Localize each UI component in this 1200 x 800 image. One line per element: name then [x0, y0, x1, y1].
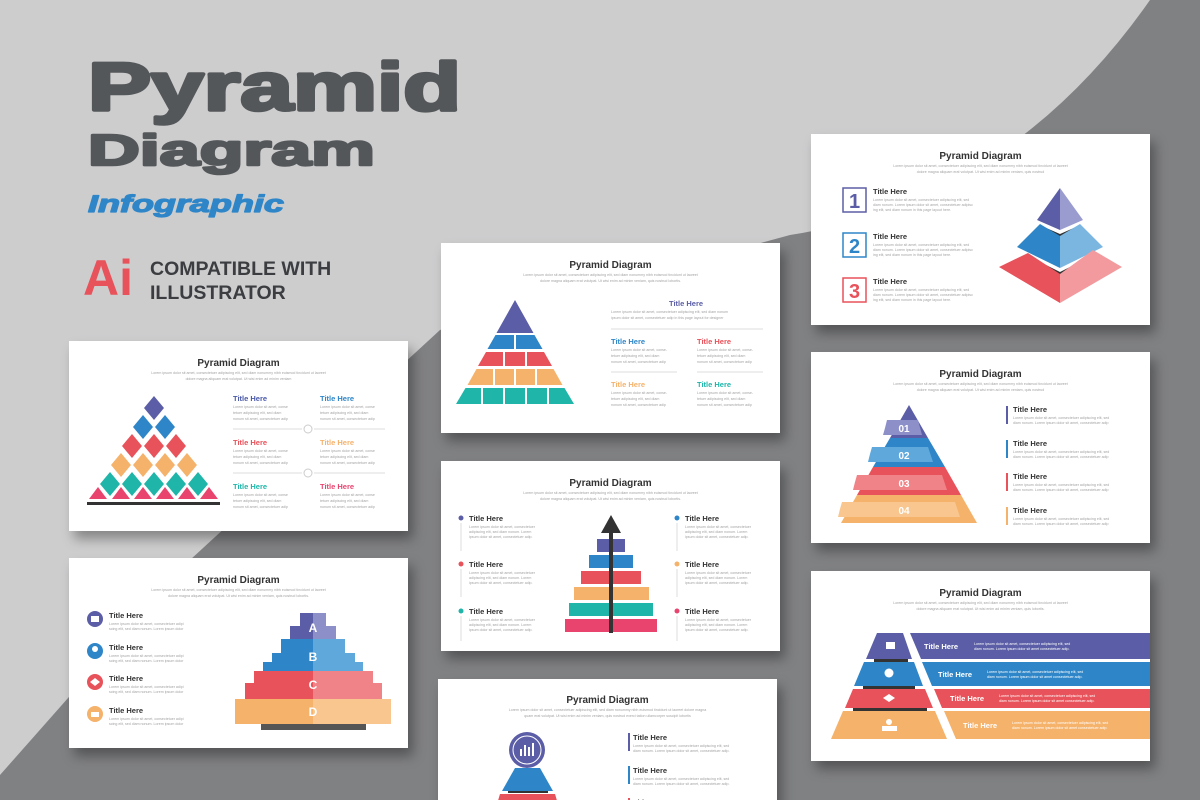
list right: Title Here: [685, 560, 719, 569]
panel: pyramid with bands: Pyramid Diagram: [939, 588, 1022, 599]
list: Lorem ipsum dolor sit amet, consectetuer adipiscing elit, sed: [633, 777, 729, 781]
chart: 3D pyramid: [999, 188, 1122, 303]
list left: Title Here: [469, 560, 503, 569]
chart: stepped pyramid 01-04: 04: [898, 506, 910, 517]
panel: brick pyramid: Lorem ipsum dolor sit amet, consectetuer adipiscing elit, sed diam nonummy nibh euismod tincidunt ut laoreet: [523, 273, 698, 277]
panel: circle-top pyramid (cropped): Pyramid Diagram: [566, 695, 649, 706]
badge: Ai compatible: Ai: [83, 250, 133, 306]
list right: ipsum dolor sit amet, consectetuer adip.: [685, 581, 749, 585]
text blocks: Lorem ipsum dolor sit amet, conse-: [611, 391, 668, 395]
text blocks: tetuer adipiscing elit, sed diam: [611, 354, 659, 358]
panel: arrow stacked pyramid: dolore magna aliquam erat volutpat. Ut wisi enim ad minim veniam, quis nostrud lobortis.: [540, 497, 681, 501]
list left: [458, 514, 536, 641]
text blocks: [611, 299, 763, 407]
text blocks: nonum sit amet, consectetuer adip: [233, 461, 288, 465]
text blocks: Lorem ipsum dolor sit amet, conse: [233, 405, 288, 409]
chart: stepped pyramid 01-04: 03: [898, 479, 910, 490]
list: Lorem ipsum dolor sit amet, consectetuer adipiscing elit, sed: [633, 744, 729, 748]
list: Title Here: [1013, 405, 1047, 414]
text blocks: tetuer adipiscing elit, sed diam: [233, 455, 281, 459]
text blocks: Lorem ipsum dolor sit amet, conse: [233, 493, 288, 497]
bands with titles: Lorem ipsum dolor sit amet, consectetuer adipiscing elit, sed: [987, 670, 1083, 674]
panel: pyramid with bands: Lorem ipsum dolor sit amet, consectetuer adipiscing elit, sed diam nonummy nibh euismod tincidunt ut laoreet: [893, 601, 1068, 605]
list: Lorem ipsum dolor sit amet, consectetuer adipiscing elit, sed: [1013, 483, 1109, 487]
text blocks: Title Here: [697, 337, 731, 346]
panel: circle-top pyramid (cropped): quam erat volutpat. Ut wisi enim ad minim veniam, quis nostrud exerci tation ullamcorper suscipit lobortis: [524, 714, 691, 718]
title: Diagram: Diagram: [88, 125, 375, 175]
text blocks: nonum sit amet, consectetuer adip: [233, 417, 288, 421]
chart: ABCD pyramid: A: [309, 621, 318, 635]
list left: Lorem ipsum dolor sit amet, consectetuer: [469, 571, 536, 575]
panel: ABCD step pyramid: Lorem ipsum dolor sit amet, consectetuer adipiscing elit, sed diam nonummy nibh euismod tincidunt ut laoreet: [151, 588, 326, 592]
text blocks: Title Here: [669, 299, 703, 308]
panel: pyramid with bands: [811, 571, 1150, 761]
list: Title Here: [1013, 439, 1047, 448]
bands with titles: diam nonum. Lorem ipsum dolor sit amet consectetuer adip.: [1012, 726, 1107, 730]
numbered list: 3: [849, 281, 860, 303]
panel: circle-top pyramid (cropped): [438, 679, 777, 800]
panel: arrow stacked pyramid: Lorem ipsum dolor sit amet, consectetuer adipiscing elit, sed diam nonummy nibh euismod tincidunt ut laoreet: [523, 491, 698, 495]
list left: adipiscing elit, sed diam nonum. Lorem: [469, 576, 531, 580]
text blocks: Lorem ipsum dolor sit amet, conse: [320, 405, 375, 409]
icon list: scing elit, sed diam nonum. Lorem ipsum dolor: [109, 690, 184, 694]
list: Title Here: [633, 733, 667, 742]
text blocks: tetuer adipiscing elit, sed diam: [320, 411, 368, 415]
icon list: scing elit, sed diam nonum. Lorem ipsum dolor: [109, 627, 184, 631]
list: diam nonum. Lorem ipsum dolor sit amet, consectetuer adip: [1013, 455, 1108, 459]
icon list: Lorem ipsum dolor sit amet, consectetuer adipi: [109, 685, 184, 689]
text blocks: Lorem ipsum dolor sit amet, conse: [233, 449, 288, 453]
list right: adipiscing elit, sed diam nonum. Lorem: [685, 530, 747, 534]
bands with titles: Title Here: [938, 670, 972, 679]
text blocks: nonum sit amet, consectetuer adip: [233, 505, 288, 509]
list right: Lorem ipsum dolor sit amet, consectetuer: [685, 618, 752, 622]
text blocks: ipsum dolor sit amet, consectetuer adip in this page layout for designer: [611, 316, 724, 320]
panel: stepped numbered pyramid: Pyramid Diagram: [939, 369, 1022, 380]
title block: [88, 49, 461, 217]
icon list: scing elit, sed diam nonum. Lorem ipsum dolor: [109, 722, 184, 726]
title: Pyramid: Pyramid: [88, 49, 461, 125]
bands with titles: Title Here: [963, 721, 997, 730]
text blocks: tetuer adipiscing elit, sed diam: [233, 499, 281, 503]
numbered list: Title Here: [873, 232, 907, 241]
numbered list: diam nonum. Lorem ipsum dolor sit amet, consectetuer adipisc: [873, 248, 973, 252]
list left: Lorem ipsum dolor sit amet, consectetuer: [469, 525, 536, 529]
panel: circle-top pyramid (cropped): Lorem ipsum dolor sit amet, consectetuer adipiscing elit, sed diam nonummy nibh euismod tincidunt ut laoreet dolore magna: [509, 708, 706, 712]
numbered list: Title Here: [873, 187, 907, 196]
chart: stepped pyramid 01-04: 01: [898, 424, 910, 435]
icon list: Title Here: [109, 643, 143, 652]
panel: arrow stacked pyramid: [441, 461, 780, 651]
list: Lorem ipsum dolor sit amet, consectetuer adipiscing elit, sed: [1013, 450, 1109, 454]
panel: arrow stacked pyramid: Pyramid Diagram: [569, 478, 652, 489]
list: diam nonum. Lorem ipsum dolor sit amet, consectetuer adip.: [633, 782, 729, 786]
chart: stepped pyramid 01-04: 02: [898, 451, 910, 462]
list right: Lorem ipsum dolor sit amet, consectetuer: [685, 525, 752, 529]
chart: diamond grid pyramid: [87, 396, 220, 505]
panel: diamond pyramid: [69, 341, 408, 531]
icon list: Lorem ipsum dolor sit amet, consectetuer adipi: [109, 654, 184, 658]
list right: adipiscing elit, sed diam nonum. Lorem: [685, 576, 747, 580]
panel: brick pyramid: Pyramid Diagram: [569, 260, 652, 271]
panel: diamond pyramid: dolore magna aliquam erat volutpat. Ut wisi enim ad minim veniam: [186, 377, 291, 381]
panel: ABCD step pyramid: Pyramid Diagram: [197, 575, 280, 586]
list left: ipsum dolor sit amet, consectetuer adip.: [469, 535, 533, 539]
icon list: scing elit, sed diam nonum. Lorem ipsum dolor: [109, 659, 184, 663]
list left: ipsum dolor sit amet, consectetuer adip.: [469, 628, 533, 632]
list: [1006, 405, 1109, 526]
panel: stepped numbered pyramid: [811, 352, 1150, 543]
text blocks: Title Here: [320, 438, 354, 447]
text blocks: Lorem ipsum dolor sit amet, conse: [320, 493, 375, 497]
list left: ipsum dolor sit amet, consectetuer adip.: [469, 581, 533, 585]
list left: adipiscing elit, sed diam nonum. Lorem: [469, 623, 531, 627]
text blocks: tetuer adipiscing elit, sed diam: [320, 499, 368, 503]
chart: circle pyramid: [497, 732, 558, 800]
numbered list: 1: [849, 191, 860, 213]
chart: ABCD pyramid: C: [309, 678, 318, 692]
panel: stepped numbered pyramid: dolore magna aliquam erat volutpat. Ut wisi enim ad minim veniam, quis nostrud: [917, 388, 1044, 392]
list right: adipiscing elit, sed diam nonum. Lorem: [685, 623, 747, 627]
bands with titles: Title Here: [950, 694, 984, 703]
icon list: [87, 611, 184, 726]
text blocks: Title Here: [233, 394, 267, 403]
subtitle: Infographic: Infographic: [88, 191, 284, 217]
text blocks: nonum sit amet, consectetuer adip: [320, 417, 375, 421]
text blocks: tetuer adipiscing elit, sed diam: [320, 455, 368, 459]
panel: 3D pyramid numbered: dolore magna aliquam erat volutpat. Ut wisi enim ad minim veniam, quis nostrud: [917, 170, 1044, 174]
panel: pyramid with bands: dolore magna aliquam erat volutpat. Ut wisi enim ad minim veniam, quis lobortis.: [916, 607, 1045, 611]
list: Lorem ipsum dolor sit amet, consectetuer adipiscing elit, sed: [1013, 517, 1109, 521]
bands with titles: diam nonum. Lorem ipsum dolor sit amet consectetuer adip.: [987, 675, 1082, 679]
numbered list: Lorem ipsum dolor sit amet, consectetuer adipiscing elit, sed: [873, 243, 969, 247]
panel: brick pyramid: [441, 243, 780, 433]
numbered list: ing elit, sed diam nonum in this page layout here.: [873, 298, 951, 302]
chart: brick pyramid: [456, 300, 574, 405]
list: diam nonum. Lorem ipsum dolor sit amet, consectetuer adip: [1013, 421, 1108, 425]
panel: diamond pyramid: Lorem ipsum dolor sit amet, consectetuer adipiscing elit, sed diam nonummy nibh euismod tincidunt ut laoreet: [151, 371, 326, 375]
badge: Ai compatible: [83, 250, 331, 306]
text blocks: nonum sit amet, consectetuer adip: [320, 505, 375, 509]
panel: 3D pyramid numbered: Pyramid Diagram: [939, 151, 1022, 162]
text blocks: Lorem ipsum dolor sit amet, conse-: [697, 348, 754, 352]
panel: diamond pyramid: Pyramid Diagram: [197, 358, 280, 369]
list right: Lorem ipsum dolor sit amet, consectetuer: [685, 571, 752, 575]
text blocks: Lorem ipsum dolor sit amet, conse-: [611, 348, 668, 352]
icon list: Title Here: [109, 674, 143, 683]
text blocks: nonum sit amet, consectetuer adip: [320, 461, 375, 465]
panel: ABCD step pyramid: [69, 558, 408, 748]
list left: adipiscing elit, sed diam nonum. Lorem: [469, 530, 531, 534]
panel: stepped numbered pyramid: Lorem ipsum dolor sit amet, consectetuer adipiscing elit, sed diam nonummy nibh euismod tincidunt ut laoreet: [893, 382, 1068, 386]
text blocks: Title Here: [611, 337, 645, 346]
numbered list: diam nonum. Lorem ipsum dolor sit amet, consectetuer adipisc: [873, 293, 973, 297]
text blocks: Title Here: [320, 394, 354, 403]
list left: Title Here: [469, 514, 503, 523]
text blocks: nonum sit amet, consectetuer adip: [611, 403, 666, 407]
badge: Ai compatible: ILLUSTRATOR: [150, 282, 286, 304]
list: Title Here: [1013, 506, 1047, 515]
list: [628, 733, 729, 800]
text blocks: Lorem ipsum dolor sit amet, consectetuer adipiscing elit, sed diam nonum: [611, 310, 728, 314]
text blocks: tetuer adipiscing elit, sed diam: [697, 354, 745, 358]
bands with titles: [910, 633, 1150, 739]
list left: Lorem ipsum dolor sit amet, consectetuer: [469, 618, 536, 622]
bands with titles: Lorem ipsum dolor sit amet, consectetuer adipiscing elit, sed: [1012, 721, 1108, 725]
chart: ABCD pyramid: [235, 613, 391, 730]
bands with titles: Lorem ipsum dolor sit amet, consectetuer adipiscing elit, sed: [974, 642, 1070, 646]
text blocks: tetuer adipiscing elit, sed diam: [697, 397, 745, 401]
list: diam nonum. Lorem ipsum dolor sit amet, consectetuer adip: [1013, 488, 1108, 492]
list: diam nonum. Lorem ipsum dolor sit amet, consectetuer adip.: [633, 749, 729, 753]
list: Title Here: [633, 766, 667, 775]
bands with titles: diam nonum. Lorem ipsum dolor sit amet consectetuer adip.: [999, 699, 1094, 703]
chart: ABCD pyramid: B: [309, 650, 318, 664]
text blocks: nonum sit amet, consectetuer adip: [611, 360, 666, 364]
icon list: Title Here: [109, 706, 143, 715]
list: diam nonum. Lorem ipsum dolor sit amet, consectetuer adip: [1013, 522, 1108, 526]
icon list: Lorem ipsum dolor sit amet, consectetuer adipi: [109, 622, 184, 626]
text blocks: Title Here: [233, 438, 267, 447]
bands with titles: Lorem ipsum dolor sit amet, consectetuer adipiscing elit, sed: [999, 694, 1095, 698]
chart: stepped pyramid 01-04: [838, 405, 977, 523]
list right: Title Here: [685, 514, 719, 523]
panel: 3D pyramid numbered: Lorem ipsum dolor sit amet, consectetuer adipiscing elit, sed diam nonummy nibh euismod tincidunt ut laoreet: [893, 164, 1068, 168]
text blocks: Title Here: [233, 482, 267, 491]
numbered list: diam nonum. Lorem ipsum dolor sit amet, consectetuer adipisc: [873, 203, 973, 207]
panel: ABCD step pyramid: dolore magna aliquam erat volutpat. Ut wisi enim ad minim veniam, quis nostrud lobortis.: [168, 594, 309, 598]
bands with titles: diam nonum. Lorem ipsum dolor sit amet consectetuer adip.: [974, 647, 1069, 651]
text blocks: Title Here: [320, 482, 354, 491]
text blocks: tetuer adipiscing elit, sed diam: [611, 397, 659, 401]
numbered list: Title Here: [873, 277, 907, 286]
numbered list: ing elit, sed diam nonum in this page layout here.: [873, 208, 951, 212]
text blocks: nonum sit amet, consectetuer adip: [697, 403, 752, 407]
text blocks: Lorem ipsum dolor sit amet, conse-: [697, 391, 754, 395]
list right: ipsum dolor sit amet, consectetuer adip.: [685, 535, 749, 539]
numbered list: Lorem ipsum dolor sit amet, consectetuer adipiscing elit, sed: [873, 198, 969, 202]
list right: [674, 514, 752, 641]
text blocks: nonum sit amet, consectetuer adip: [697, 360, 752, 364]
text blocks: Title Here: [697, 380, 731, 389]
numbered list: Lorem ipsum dolor sit amet, consectetuer adipiscing elit, sed: [873, 288, 969, 292]
list right: ipsum dolor sit amet, consectetuer adip.: [685, 628, 749, 632]
text blocks: Lorem ipsum dolor sit amet, conse: [320, 449, 375, 453]
text blocks: [233, 394, 385, 509]
list right: Title Here: [685, 607, 719, 616]
numbered list: ing elit, sed diam nonum in this page layout here.: [873, 253, 951, 257]
numbered list: 2: [849, 236, 860, 258]
list: Lorem ipsum dolor sit amet, consectetuer adipiscing elit, sed: [1013, 416, 1109, 420]
chart: stacked bars with arrow: [565, 515, 657, 633]
text blocks: tetuer adipiscing elit, sed diam: [233, 411, 281, 415]
panel: brick pyramid: dolore magna aliquam erat volutpat. Ut wisi enim ad minim veniam, quis nostrud lobortis.: [540, 279, 681, 283]
icon list: Lorem ipsum dolor sit amet, consectetuer adipi: [109, 717, 184, 721]
badge: Ai compatible: COMPATIBLE WITH: [150, 258, 331, 280]
text blocks: Title Here: [611, 380, 645, 389]
chart: ABCD pyramid: D: [309, 705, 318, 719]
chart: pyramid tiers: [831, 633, 947, 739]
bands with titles: Title Here: [924, 642, 958, 651]
icon list: Title Here: [109, 611, 143, 620]
list: Title Here: [1013, 472, 1047, 481]
numbered list: [843, 187, 973, 303]
panel: 3D pyramid numbered: [811, 134, 1150, 325]
list left: Title Here: [469, 607, 503, 616]
